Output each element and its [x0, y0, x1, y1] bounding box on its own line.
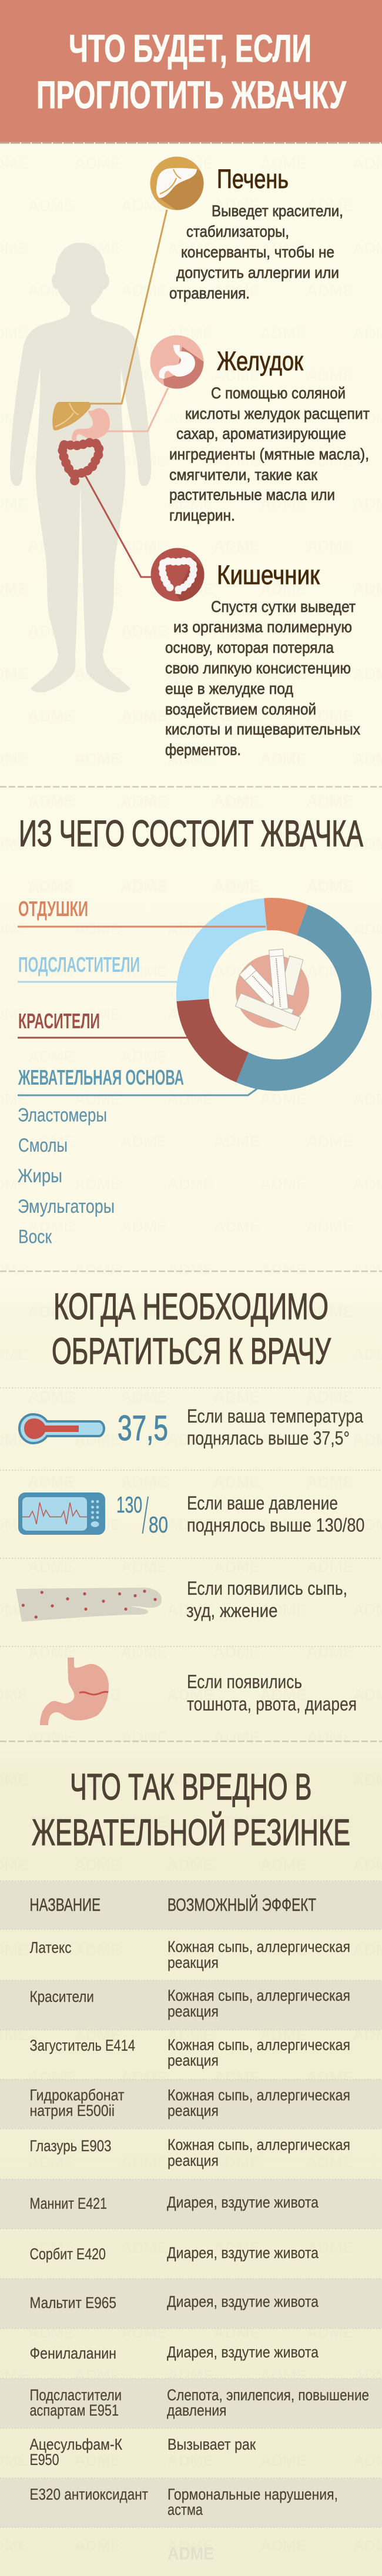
list: gum base ingredients: Воск	[18, 1226, 52, 1247]
text: intestine: кислоты и пищеварительных	[165, 720, 360, 738]
icon: arm with rash	[16, 1588, 162, 1622]
heading: liver: Печень	[217, 164, 289, 194]
legend: gum base: ЖЕВАТЕЛЬНАЯ ОСНОВА	[18, 1065, 184, 1089]
text: stomach: растительные масла или	[169, 486, 335, 504]
row: latex	[29, 1938, 350, 1971]
row: E320: астма	[167, 2501, 203, 2518]
title	[36, 26, 347, 116]
panel: intestine	[150, 548, 360, 759]
list: gum base ingredients: Эмульгаторы	[18, 1196, 115, 1217]
legend: flavourings: ОТДУШКИ	[18, 897, 88, 921]
row: E421	[29, 2193, 319, 2212]
text: intestine: воздействием соляной	[165, 700, 316, 718]
heading: intestine: Кишечник	[217, 560, 320, 590]
text: rash	[186, 1578, 347, 1621]
row: E950: Е950	[29, 2451, 59, 2468]
text: nausea	[187, 1671, 357, 1715]
body liver	[52, 402, 91, 431]
row: latex: Латекс	[29, 1939, 72, 1957]
text: intestine: основу, которая потеряла	[165, 639, 334, 656]
row: colourants: Кожная сыпь, аллергическая	[167, 1987, 350, 2004]
row: E951	[29, 2386, 369, 2419]
row: E500ii	[29, 2086, 350, 2119]
row: E500ii: Гидрокарбонат	[29, 2086, 125, 2104]
row: E421: Диарея, вздутие живота	[167, 2193, 319, 2211]
connector lines	[85, 210, 168, 577]
row: E414: Кожная сыпь, аллергическая	[167, 2036, 350, 2054]
panel: liver	[150, 156, 343, 302]
list: gum base ingredients: Эластомеры	[18, 1105, 107, 1126]
panel: stomach	[150, 335, 370, 524]
panel: composition	[18, 813, 371, 1247]
row: latex: Кожная сыпь, аллергическая	[167, 1938, 350, 1956]
row: E420: Диарея, вздутие живота	[167, 2244, 319, 2262]
row: E500ii: натрия Е500ii	[29, 2102, 115, 2119]
value: 130/80: 80	[149, 1512, 168, 1538]
text: stomach: С помощью соляной	[211, 384, 346, 402]
value: 37,5: 37,5	[118, 1408, 168, 1448]
table header: ВОЗМОЖНЫЙ ЭФФЕКТ	[167, 1894, 316, 1915]
heading: doctor	[52, 1286, 331, 1372]
row: phenylalanine	[29, 2343, 319, 2362]
row: blood pressure	[18, 1492, 364, 1538]
row: E421: Маннит Е421	[29, 2195, 107, 2212]
row: E950	[29, 2436, 256, 2468]
row: E951: Подсластители	[29, 2386, 122, 2404]
icon: monitor	[18, 1492, 105, 1535]
text: intestine: еще в желудке под	[165, 680, 293, 697]
panel: body organs	[10, 210, 168, 692]
row: E320: Е320 антиоксидант	[29, 2486, 148, 2503]
row: E320: Гормональные нарушения,	[167, 2486, 338, 2503]
list: gum base ingredients	[18, 1105, 115, 1247]
body intestine	[62, 442, 99, 481]
text: intestine: свою липкую консистенцию	[165, 659, 351, 677]
text: stomach	[169, 384, 370, 524]
row: E903: Глазурь Е903	[29, 2137, 112, 2155]
icon: stomach with wave	[40, 1658, 109, 1725]
row: phenylalanine: Диарея, вздутие живота	[167, 2343, 319, 2361]
text: liver: стабилизаторы,	[186, 223, 289, 240]
text: intestine: Спустя сутки выведет	[211, 598, 356, 616]
text: stomach: глицерин.	[169, 507, 235, 524]
text: stomach: ингредиенты (мятные масла),	[169, 445, 369, 463]
text: stomach: сахар, ароматизирующие	[176, 425, 346, 442]
icon: thermometer	[19, 1414, 104, 1443]
table header: НАЗВАНИЕ	[29, 1894, 100, 1915]
legend: sweeteners: ПОДСЛАСТИТЕЛИ	[18, 952, 140, 977]
row: E965	[29, 2293, 319, 2312]
row: E951: давления	[167, 2401, 227, 2419]
text: intestine	[165, 598, 360, 759]
row: E414: реакция	[167, 2052, 219, 2069]
text: blood pressure: Если ваше давление	[187, 1492, 338, 1514]
text: stomach: кислоты желудок расщепит	[185, 405, 370, 422]
table	[0, 1881, 382, 2527]
text: rash: зуд, жжение	[186, 1600, 277, 1621]
row: latex: реакция	[167, 1954, 219, 1971]
row: temperature	[19, 1406, 363, 1449]
donut chart	[176, 898, 371, 1091]
text: liver: допустить аллергии или	[176, 264, 339, 281]
text: rash: Если появились сыпь,	[187, 1578, 347, 1599]
row: E420: Сорбит Е420	[29, 2245, 106, 2263]
text: liver: Выведет красители,	[212, 202, 343, 220]
row: E500ii: Кожная сыпь, аллергическая	[167, 2086, 350, 2104]
row: E414	[29, 2036, 350, 2069]
text: liver: консерванты, чтобы не	[181, 243, 334, 261]
row: E414: Загуститель Е414	[29, 2037, 135, 2054]
value: 130/80	[116, 1492, 168, 1538]
row: colourants: Красители	[29, 1988, 94, 2005]
row: E950: Ацесульфам-К	[29, 2436, 122, 2453]
footer logo: ADME	[167, 2543, 214, 2564]
icon: chewing gum sticks	[236, 949, 309, 1031]
row: E950: Вызывает рак	[167, 2436, 256, 2453]
row: rash	[16, 1578, 347, 1622]
row: E951: аспартам Е951	[29, 2401, 119, 2419]
text: temperature	[187, 1406, 363, 1449]
text: intestine: из организма полимерную	[173, 618, 352, 636]
list: gum base ingredients: Жиры	[18, 1165, 62, 1186]
icon: intestine	[150, 548, 205, 602]
list: gum base ingredients: Смолы	[18, 1135, 68, 1156]
row: E965: Диарея, вздутие живота	[167, 2293, 319, 2310]
row: E420	[29, 2244, 319, 2263]
panel: when to see a doctor	[0, 1286, 382, 1725]
human silhouette	[10, 243, 151, 692]
text: liver	[169, 202, 343, 302]
heading: harmful	[32, 1766, 350, 1853]
icon: liver	[150, 156, 203, 210]
text: blood pressure	[187, 1492, 364, 1536]
text: liver: отравления.	[169, 284, 250, 302]
row: E903: реакция	[167, 2152, 219, 2169]
value: 130/80: 130	[116, 1492, 142, 1518]
text: nausea: Если появились	[187, 1671, 302, 1692]
row: E965: Мальтит Е965	[29, 2294, 116, 2312]
row: nausea	[40, 1658, 357, 1725]
heading: stomach: Желудок	[217, 346, 303, 376]
icon: stomach	[150, 335, 203, 389]
row: phenylalanine: Фенилаланин	[29, 2344, 116, 2362]
row: E500ii: реакция	[167, 2102, 219, 2119]
panel: header	[0, 0, 382, 143]
text: stomach: смягчители, такие как	[169, 466, 317, 484]
panel: harmful ingredients	[0, 1766, 382, 2527]
body stomach	[72, 408, 110, 441]
row: colourants	[29, 1987, 350, 2020]
legend: colourants: КРАСИТЕЛИ	[18, 1009, 100, 1033]
text: temperature: поднялась выше 37,5°	[187, 1428, 350, 1449]
table header	[29, 1894, 316, 1915]
row: colourants: реакция	[167, 2003, 219, 2020]
text: intestine: ферментов.	[165, 741, 241, 759]
row: E903: Кожная сыпь, аллергическая	[167, 2136, 350, 2154]
row: E903	[29, 2136, 350, 2169]
row: E320	[29, 2486, 338, 2518]
